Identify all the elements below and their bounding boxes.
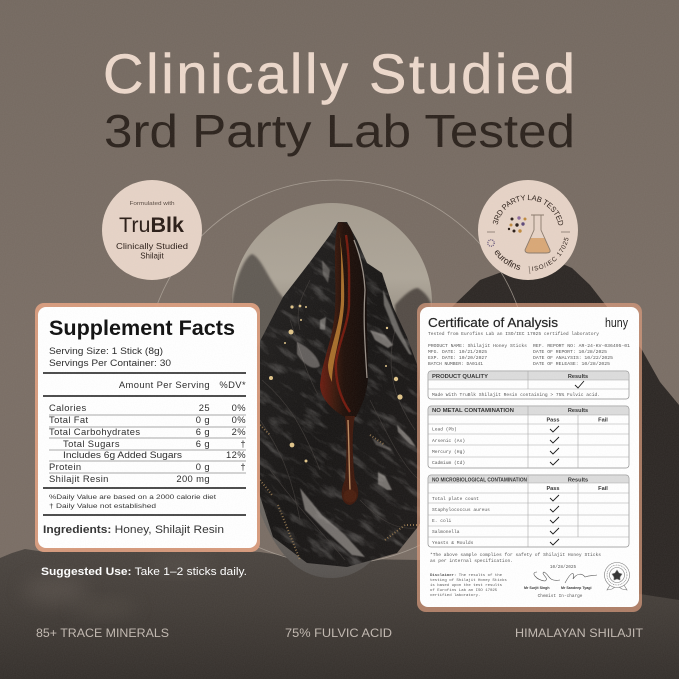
row: total carbohydrates: Total Carbohydrates <box>49 426 140 437</box>
honey amber streak <box>328 230 344 382</box>
row: total carbohydrates: 2% <box>232 426 246 437</box>
table: no microbiological contamination: Yeasts & Moulds <box>432 540 474 546</box>
suggested use: Suggested Use: Take 1–2 sticks daily. <box>41 566 247 578</box>
row: protein: † <box>240 461 246 472</box>
arc heading: 3RD PARTY LAB TESTED <box>492 194 564 226</box>
compliance note: as per internal specification. <box>430 558 513 564</box>
rock texture <box>260 280 420 560</box>
table: no metal contamination: Mercury (Hg) <box>432 449 465 455</box>
gold dust <box>260 425 420 560</box>
report details: DATE OF ANALYSIS: 10/22/2025 <box>533 355 613 361</box>
disclaimer: certified laboratory. <box>430 593 480 598</box>
certification seal <box>604 562 630 590</box>
table: no metal contamination: NO METAL CONTAMINATION <box>432 408 514 414</box>
mountain: foreground base <box>0 545 679 679</box>
serving size: Serving Size: 1 Stick (8g) <box>49 346 163 356</box>
clinically studied: Clinically Studied <box>116 242 188 251</box>
product details: MFG. DATE: 10/21/2025 <box>428 349 487 355</box>
row: total carbohydrates <box>49 426 246 437</box>
ingredients: Ingredients: Honey, Shilajit Resin <box>43 524 224 536</box>
table: no metal contamination: Lead (Pb) <box>432 426 457 432</box>
thin ring behind photo <box>145 180 529 564</box>
huny logo: huny <box>605 315 628 330</box>
table: no metal contamination: Results <box>568 408 588 414</box>
rock grain texture <box>260 229 420 566</box>
honey drip <box>342 416 358 505</box>
row: protein: Protein <box>49 461 82 472</box>
row: protein: 0 g <box>196 461 210 472</box>
table: no metal contamination: Arsenic (As) <box>432 438 465 444</box>
disclaimer: Disclaimer: The results of the <box>430 573 503 578</box>
row: total sugars: † <box>240 438 246 449</box>
table: product quality <box>428 371 629 399</box>
subtitle: 3rd Party Lab Tested <box>104 105 575 157</box>
oval backdrop behind rock <box>232 203 432 578</box>
table: no microbiological contamination: Fail <box>598 486 608 492</box>
tested from: Tested from Eurofins Lab an ISO/IEC 17025 certified laboratory <box>428 331 599 337</box>
panel frame <box>35 303 260 552</box>
certificate frame <box>417 303 642 612</box>
date: 10/28/2025 <box>550 565 577 570</box>
formulated with: Formulated with <box>130 201 175 207</box>
row: calories: 25 <box>199 402 210 413</box>
table: no metal contamination: Cadmium (Cd) <box>432 460 465 466</box>
panel: certificate of analysis <box>417 303 642 612</box>
row: calories: 0% <box>232 402 246 413</box>
honey drip highlight <box>348 420 350 490</box>
iso: ISO/IEC 17025 <box>532 237 568 271</box>
caption: fulvic acid: 75% FULVIC ACID <box>285 626 392 640</box>
product details: BATCH NUMBER: DA0141 <box>428 361 483 367</box>
row: calories: Calories <box>49 402 87 413</box>
row: total sugars: 6 g <box>196 438 210 449</box>
chemist in-charge: Chemist In-charge <box>538 594 583 599</box>
product details <box>428 343 527 367</box>
title: Clinically Studied <box>103 42 575 105</box>
table: no microbiological contamination: Results <box>568 478 588 484</box>
table: no microbiological contamination: E. coli <box>432 518 452 524</box>
table: no microbiological contamination: Salmonella <box>432 529 460 535</box>
certificate heading: Certificate of Analysis <box>428 315 559 330</box>
badge: 3rd party lab tested <box>478 180 578 280</box>
badge: TruBlk <box>102 180 202 280</box>
row: added sugars <box>63 449 246 460</box>
row: shilajit resin: Shilajit Resin <box>49 473 109 484</box>
badge disc <box>102 180 202 280</box>
TruBlk logo: TruBlk <box>119 214 184 237</box>
signatures <box>534 572 597 583</box>
table: no microbiological contamination <box>428 475 629 547</box>
row: total fat <box>49 414 246 425</box>
molecule dots <box>508 216 526 233</box>
row: total carbohydrates: 6 g <box>196 426 210 437</box>
caption: trace minerals: 85+ TRACE MINERALS <box>36 626 169 640</box>
disclaimer: of Eurofins Lab an ISO 17025 <box>430 588 498 593</box>
footnotes: %Daily Value are based on a 2000 calorie diet <box>49 494 216 501</box>
row: total fat: Total Fat <box>49 414 89 425</box>
signatories: Mr Surjit Singh <box>524 586 550 590</box>
compliance note <box>430 552 601 564</box>
row: total fat: 0% <box>232 414 246 425</box>
table: no microbiological contamination: Pass <box>546 486 560 492</box>
row: shilajit resin <box>49 473 210 484</box>
servings per container: Servings Per Container: 30 <box>49 358 171 368</box>
footnotes: † Daily Value not established <box>49 503 157 510</box>
row: added sugars: 12% <box>226 449 246 460</box>
photo: shilajit rock with resin <box>260 222 420 567</box>
caption: himalayan shilajit: HIMALAYAN SHILAJIT <box>515 626 644 640</box>
eurofins logo mark <box>488 240 494 246</box>
product details: PRODUCT NAME: Shilajit Honey Sticks <box>428 343 527 349</box>
report details: REF. REPORT NO: AR-24-KV-036495-01 <box>533 343 630 349</box>
table: product quality: Results <box>568 374 588 380</box>
gold flecks <box>269 305 403 462</box>
disclaimer: is based upon the test results <box>430 583 503 588</box>
honey body <box>320 222 368 417</box>
table: no metal contamination <box>428 406 629 468</box>
row: shilajit resin: 200 mg <box>176 473 210 484</box>
row: total sugars: Total Sugars <box>63 438 120 449</box>
mountain: right background <box>430 258 679 679</box>
signatories <box>524 586 592 590</box>
compliance note: *The above sample complies for safety of Shilajit Honey Sticks <box>430 552 601 558</box>
row: total sugars <box>63 438 246 449</box>
signatories: Mr Sandeep Tyagi <box>561 586 592 590</box>
honey gloss <box>354 240 367 378</box>
certificate card <box>420 307 639 607</box>
product details: EXP. DATE: 10/20/2027 <box>428 355 487 361</box>
row: protein <box>49 461 246 472</box>
honey red streak <box>336 235 350 412</box>
disclaimer <box>430 573 507 598</box>
report details: DATE OF RELEASE: 10/28/2025 <box>533 361 610 367</box>
report details <box>533 343 630 367</box>
row: added sugars: Includes 6g Added Sugars <box>63 450 183 460</box>
disclaimer: testing of Shilajit Honey Sticks <box>430 578 507 583</box>
row: calories <box>49 402 246 413</box>
panel heading: Supplement Facts <box>49 317 235 340</box>
panel card <box>38 307 257 548</box>
column headers: %DV* <box>219 379 246 390</box>
rock body <box>257 222 422 567</box>
rock glints <box>297 260 416 557</box>
report details: DATE OF REPORT: 10/28/2025 <box>533 349 607 355</box>
badge disc <box>478 180 578 280</box>
table: no microbiological contamination: NO MICROBIOLOGICAL CONTAMINATION <box>432 478 527 484</box>
row: total fat: 0 g <box>196 414 210 425</box>
footnotes <box>49 494 216 510</box>
panel: supplement facts <box>35 303 260 552</box>
table: no metal contamination: Fail <box>598 418 608 424</box>
column headers: Amount Per Serving <box>119 379 210 390</box>
table: product quality: Made With TruBlk Shilajit Resin containing > 75% Fulvic acid. <box>432 393 600 398</box>
eurofins: eurofins <box>494 250 520 270</box>
honey drip bulb <box>344 490 356 502</box>
flask icon <box>525 215 550 253</box>
table: product quality: PRODUCT QUALITY <box>432 374 488 380</box>
shilajit: Shilajit <box>140 252 165 260</box>
side ticks <box>487 232 570 274</box>
table: no metal contamination: Pass <box>546 418 560 424</box>
table: no microbiological contamination: Staphylococcus aureus <box>432 507 490 513</box>
table: no microbiological contamination: Total plate count <box>432 496 479 502</box>
